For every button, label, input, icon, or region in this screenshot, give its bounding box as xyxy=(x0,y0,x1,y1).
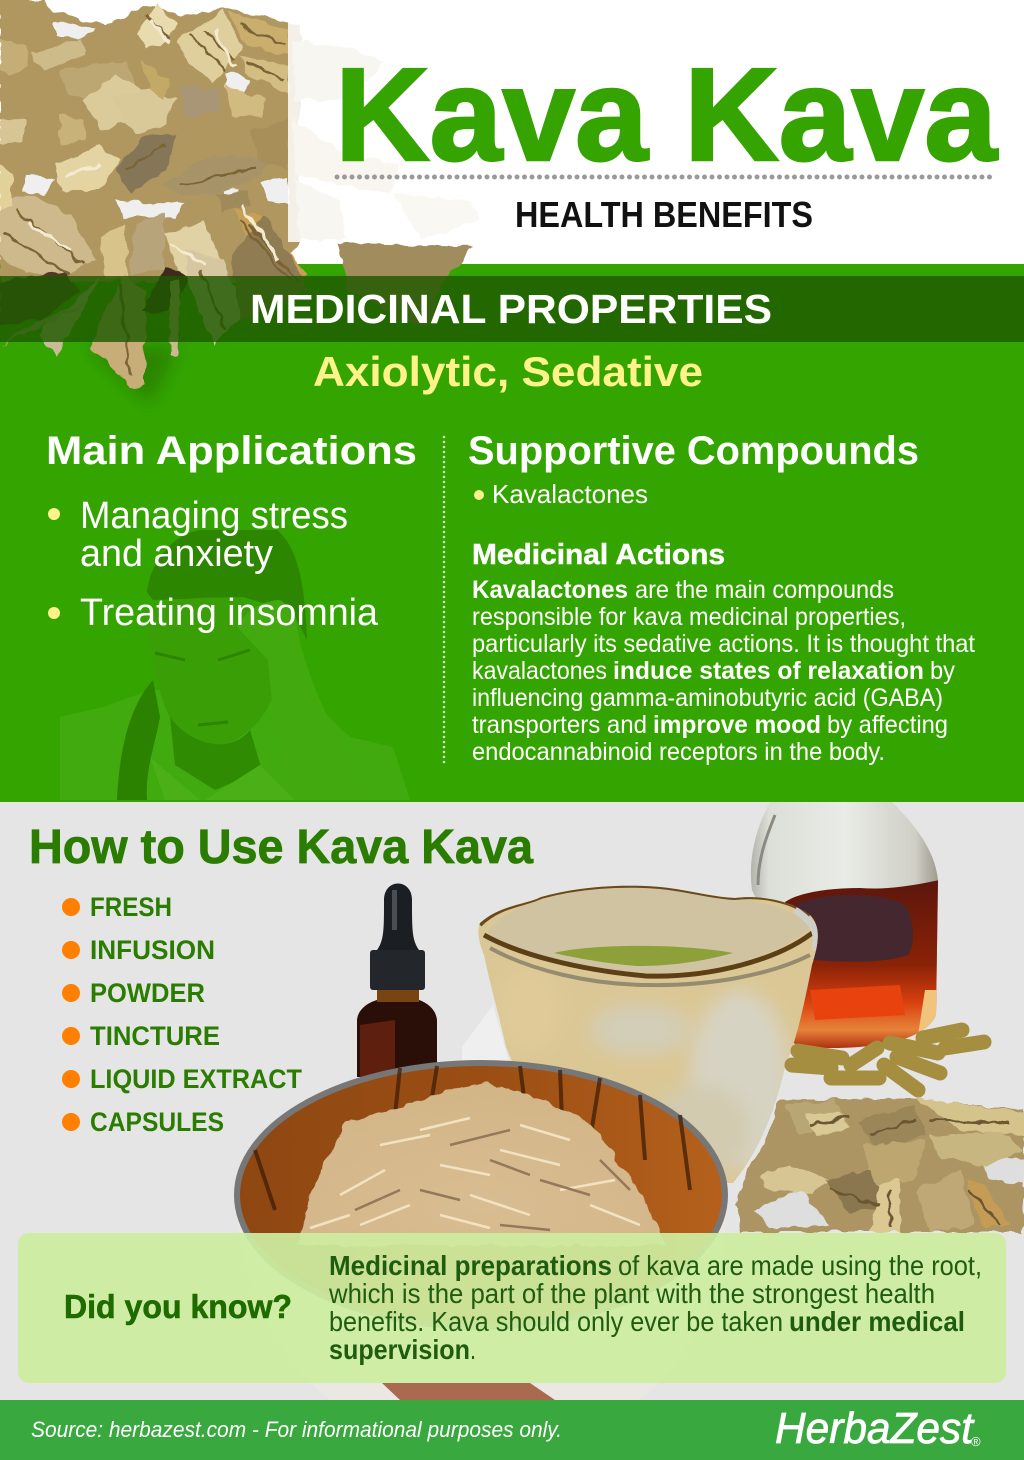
list item: powder: POWDER xyxy=(90,978,205,1008)
image: dropper bottle xyxy=(357,884,437,1077)
image: white napkin behind cup xyxy=(462,1005,510,1065)
list item: infusion: INFUSION xyxy=(90,935,215,965)
list item: liquid extract: LIQUID EXTRACT xyxy=(90,1064,302,1094)
list item: managing stress and anxiety: and anxiety xyxy=(80,533,273,575)
heading: how to use kava kava: How to Use Kava Kava xyxy=(29,821,533,874)
medicinal properties value: Axiolytic, Sedative xyxy=(313,348,703,395)
title dotted divider xyxy=(337,174,992,180)
subtitle: HEALTH BENEFITS xyxy=(515,194,813,235)
text block: medicinal actions description: by xyxy=(930,657,955,685)
panel: main applications xyxy=(46,429,417,634)
text block: medicinal actions description: induce states of relaxation xyxy=(613,657,924,685)
image: dried kava root chips xyxy=(0,0,480,388)
title: Kava Kava xyxy=(335,41,999,188)
footer bar xyxy=(0,1400,1024,1460)
heading: supportive compounds: Supportive Compounds xyxy=(468,429,919,473)
heading: medicinal properties: MEDICINAL PROPERTIES xyxy=(250,286,772,332)
panel: supportive compounds xyxy=(468,429,975,766)
list: forms of use xyxy=(62,892,302,1137)
image: ceramic cup of kava infusion xyxy=(470,880,825,1190)
list item: tincture: TINCTURE xyxy=(90,1021,220,1051)
text block: medicinal actions description: particularly its sedative actions. It is thought that xyxy=(472,630,975,658)
heading: medicinal actions: Medicinal Actions xyxy=(472,539,725,571)
logo: herbazest: HerbaZest xyxy=(775,1404,975,1453)
text block: medicinal actions description: improve mood xyxy=(653,711,821,739)
logo: herbazest: ® xyxy=(971,1434,981,1449)
callout text: Medicinal preparations xyxy=(329,1250,612,1281)
white translucent title backdrop xyxy=(288,20,1024,242)
list item: managing stress and anxiety: Managing stress xyxy=(80,495,348,537)
callout heading: Did you know? xyxy=(64,1288,292,1325)
callout text xyxy=(328,1250,982,1365)
callout text: . xyxy=(470,1334,476,1365)
image: kava root chips pile xyxy=(735,1098,1024,1232)
callout text: supervision xyxy=(329,1334,470,1365)
text block: medicinal actions description xyxy=(472,576,975,766)
image: kava capsules xyxy=(792,1030,984,1090)
callout text: under medical xyxy=(789,1306,965,1337)
how to use panel background xyxy=(0,802,1024,1400)
text block: medicinal actions description: Kavalactones xyxy=(472,576,628,604)
image: wooden bowl of kava powder xyxy=(234,1063,728,1400)
list item: kavalactones: Kavalactones xyxy=(492,479,648,509)
heading: main applications: Main Applications xyxy=(46,429,417,473)
list item: fresh: FRESH xyxy=(90,892,172,922)
callout: did you know xyxy=(18,1233,1006,1383)
text block: medicinal actions description: transporters and xyxy=(472,711,647,739)
callout text: benefits. Kava should only ever be taken xyxy=(329,1306,783,1337)
medicinal properties band xyxy=(0,276,1024,342)
top white header background xyxy=(0,0,1024,264)
text block: medicinal actions description: by affecting xyxy=(827,711,948,739)
text block: medicinal actions description: kavalactones xyxy=(472,657,607,685)
list item: treating insomnia: Treating insomnia xyxy=(80,592,379,634)
list item: managing stress and anxiety xyxy=(48,495,348,575)
list item: capsules: CAPSULES xyxy=(90,1107,224,1137)
image: glass bottle of kava liquid xyxy=(745,802,945,1052)
green medicinal panel background xyxy=(0,264,1024,802)
text block: medicinal actions description: endocannabinoid receptors in the body. xyxy=(472,738,885,766)
callout text: which is the part of the plant with the strongest health xyxy=(328,1278,935,1309)
callout text: of kava are made using the root, xyxy=(618,1250,982,1281)
image: faded woman with headache xyxy=(60,530,410,800)
text block: medicinal actions description: responsible for kava medicinal properties, xyxy=(472,603,906,631)
text block: medicinal actions description: are the main compounds xyxy=(635,576,894,604)
source note: Source: herbazest.com - For informational purposes only. xyxy=(31,1417,562,1442)
text block: medicinal actions description: influencing gamma-aminobutyric acid (GABA) xyxy=(472,684,943,712)
list item: fresh xyxy=(62,892,172,922)
